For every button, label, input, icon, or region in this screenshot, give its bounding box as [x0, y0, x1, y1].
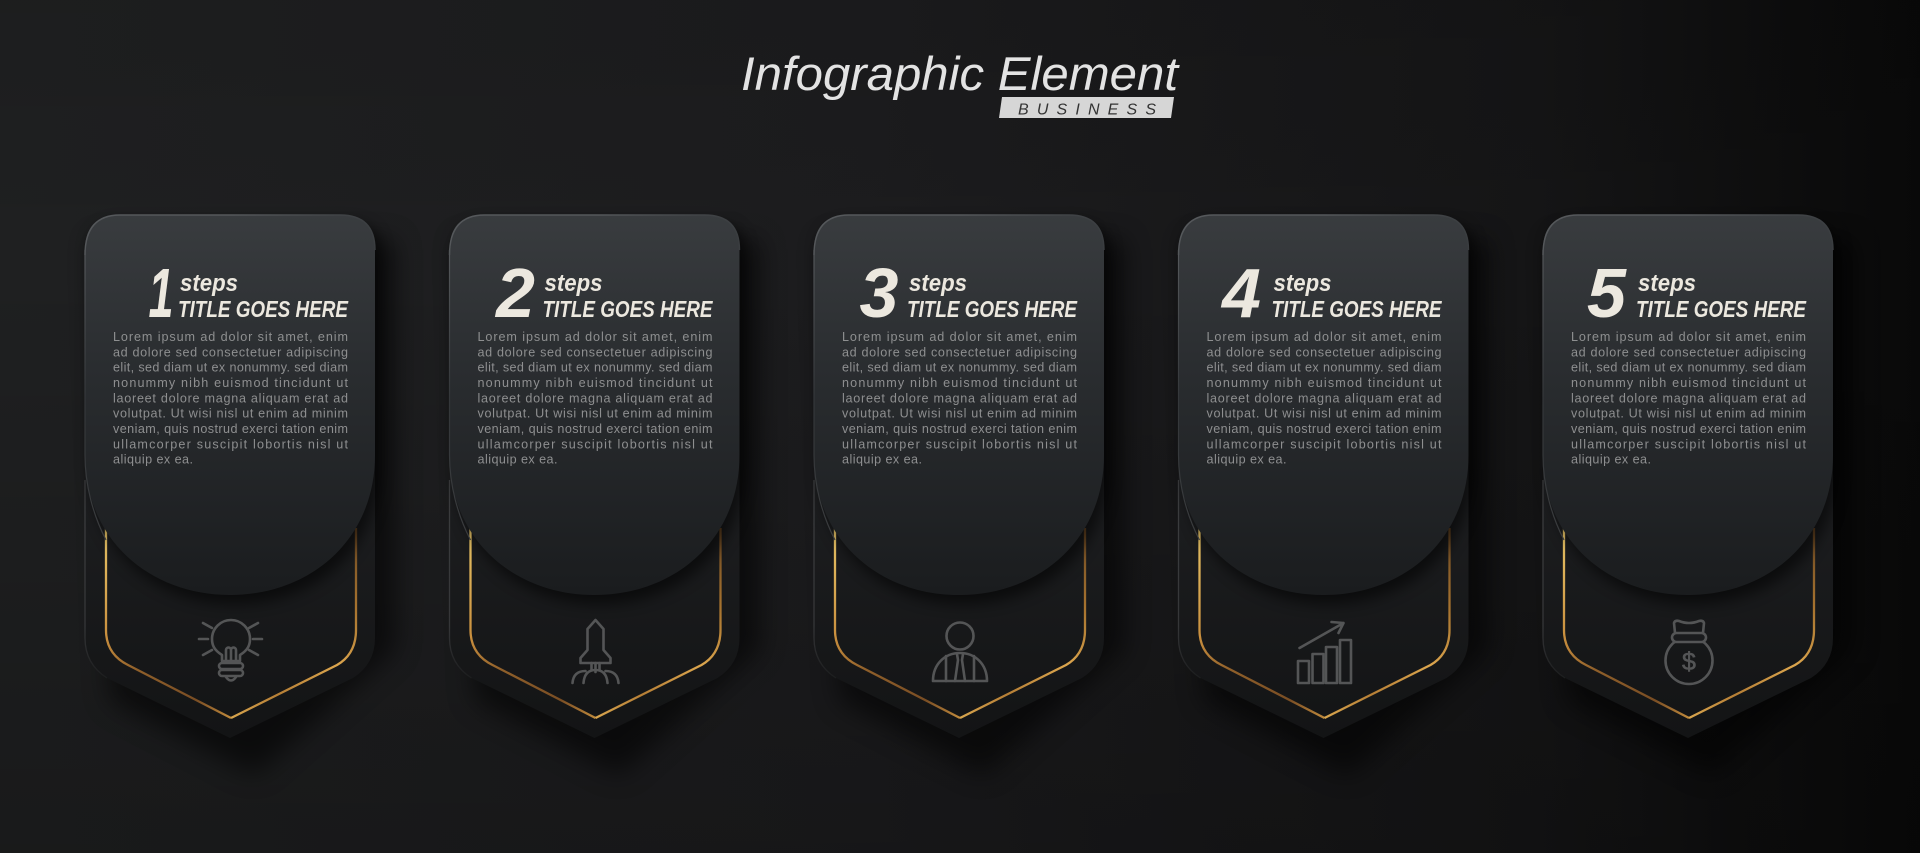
body text: veniam, quis nostrud exerci tation enim	[842, 422, 1077, 436]
step number: 2	[494, 254, 535, 332]
body text: ullamcorper suscipit lobortis nisl ut	[1571, 437, 1806, 451]
body text: Lorem ipsum ad dolor sit amet, enim	[1571, 330, 1806, 344]
body text: veniam, quis nostrud exerci tation enim	[113, 422, 348, 436]
body text: laoreet dolore magna aliquam erat ad	[1206, 391, 1442, 405]
icon: rocket	[572, 620, 618, 683]
body text: nonummy nibh euismod tincidunt ut	[1206, 376, 1442, 390]
body text: ullamcorper suscipit lobortis nisl ut	[113, 437, 348, 451]
step title: TITLE GOES HERE	[1636, 296, 1807, 322]
body text: laoreet dolore magna aliquam erat ad	[113, 391, 348, 405]
subtitle badge: BUSINESS	[1018, 102, 1156, 118]
body text: volutpat. Ut wisi nisl ut enim ad minim	[842, 407, 1077, 421]
step number: 1	[148, 254, 174, 332]
body text: laoreet dolore magna aliquam erat ad	[478, 391, 712, 405]
body text: ad dolore sed consectetuer adipiscing	[1206, 345, 1442, 359]
body text: ad dolore sed consectetuer adipiscing	[478, 345, 712, 359]
panel: step 1	[85, 215, 395, 775]
panel: step 5	[1543, 215, 1853, 775]
body text	[842, 330, 1078, 467]
body text: Lorem ipsum ad dolor sit amet, enim	[1206, 330, 1442, 344]
step title: TITLE GOES HERE	[178, 296, 349, 322]
body text: laoreet dolore magna aliquam erat ad	[842, 391, 1077, 405]
body text: volutpat. Ut wisi nisl ut enim ad minim	[1571, 407, 1806, 421]
icon: money bag	[1666, 621, 1712, 684]
step label: steps	[1638, 270, 1696, 297]
body text: veniam, quis nostrud exerci tation enim	[1571, 422, 1806, 436]
body text	[1206, 330, 1442, 467]
body text	[478, 330, 713, 467]
body text: veniam, quis nostrud exerci tation enim	[478, 422, 712, 436]
step label: steps	[909, 270, 967, 297]
body text: elit, sed diam ut ex nonummy. sed diam	[1206, 361, 1442, 375]
body text: volutpat. Ut wisi nisl ut enim ad minim	[113, 407, 348, 421]
body text: nonummy nibh euismod tincidunt ut	[478, 376, 713, 390]
body text: Lorem ipsum ad dolor sit amet, enim	[842, 330, 1077, 344]
body text: volutpat. Ut wisi nisl ut enim ad minim	[478, 407, 712, 421]
body text: elit, sed diam ut ex nonummy. sed diam	[1571, 361, 1806, 375]
body text: aliquip ex ea.	[1206, 453, 1286, 467]
body text: ullamcorper suscipit lobortis nisl ut	[1206, 437, 1442, 451]
step label: steps	[544, 270, 602, 297]
panel: step 4	[1178, 215, 1488, 775]
body text: aliquip ex ea.	[113, 453, 193, 467]
step title: TITLE GOES HERE	[907, 296, 1078, 322]
step title: TITLE GOES HERE	[1272, 296, 1442, 322]
body text: elit, sed diam ut ex nonummy. sed diam	[113, 361, 348, 375]
body text: elit, sed diam ut ex nonummy. sed diam	[478, 361, 712, 375]
body text	[113, 330, 348, 467]
body text: ullamcorper suscipit lobortis nisl ut	[478, 437, 713, 451]
body text: nonummy nibh euismod tincidunt ut	[113, 376, 348, 390]
step label: steps	[1274, 270, 1332, 297]
body text: ullamcorper suscipit lobortis nisl ut	[842, 437, 1078, 451]
body text: Lorem ipsum ad dolor sit amet, enim	[113, 330, 348, 344]
body text: ad dolore sed consectetuer adipiscing	[842, 345, 1077, 359]
body text: ad dolore sed consectetuer adipiscing	[113, 345, 348, 359]
subtitle badge	[999, 97, 1174, 118]
step number: 3	[860, 254, 899, 332]
body text: nonummy nibh euismod tincidunt ut	[1571, 376, 1806, 390]
body text: aliquip ex ea.	[842, 453, 922, 467]
panel: step 2	[450, 215, 760, 775]
body text: aliquip ex ea.	[478, 453, 558, 467]
icon: growth chart	[1298, 622, 1351, 683]
body text: laoreet dolore magna aliquam erat ad	[1571, 391, 1806, 405]
body text: ad dolore sed consectetuer adipiscing	[1571, 345, 1806, 359]
icon: businessman	[933, 622, 987, 681]
body text: nonummy nibh euismod tincidunt ut	[842, 376, 1078, 390]
body text: Lorem ipsum ad dolor sit amet, enim	[478, 330, 712, 344]
icon: light bulb	[199, 620, 262, 680]
body text: volutpat. Ut wisi nisl ut enim ad minim	[1206, 407, 1442, 421]
icon: money bag: $	[1682, 648, 1696, 676]
title: Infographic Element	[741, 47, 1180, 100]
body text: veniam, quis nostrud exerci tation enim	[1206, 422, 1442, 436]
body text: elit, sed diam ut ex nonummy. sed diam	[842, 361, 1077, 375]
step title: TITLE GOES HERE	[542, 296, 713, 322]
panel: step 3	[814, 215, 1124, 775]
body text: aliquip ex ea.	[1571, 453, 1651, 467]
body text	[1571, 330, 1806, 467]
step number: 4	[1220, 254, 1261, 332]
step number: 5	[1587, 254, 1627, 332]
step label: steps	[180, 270, 238, 297]
